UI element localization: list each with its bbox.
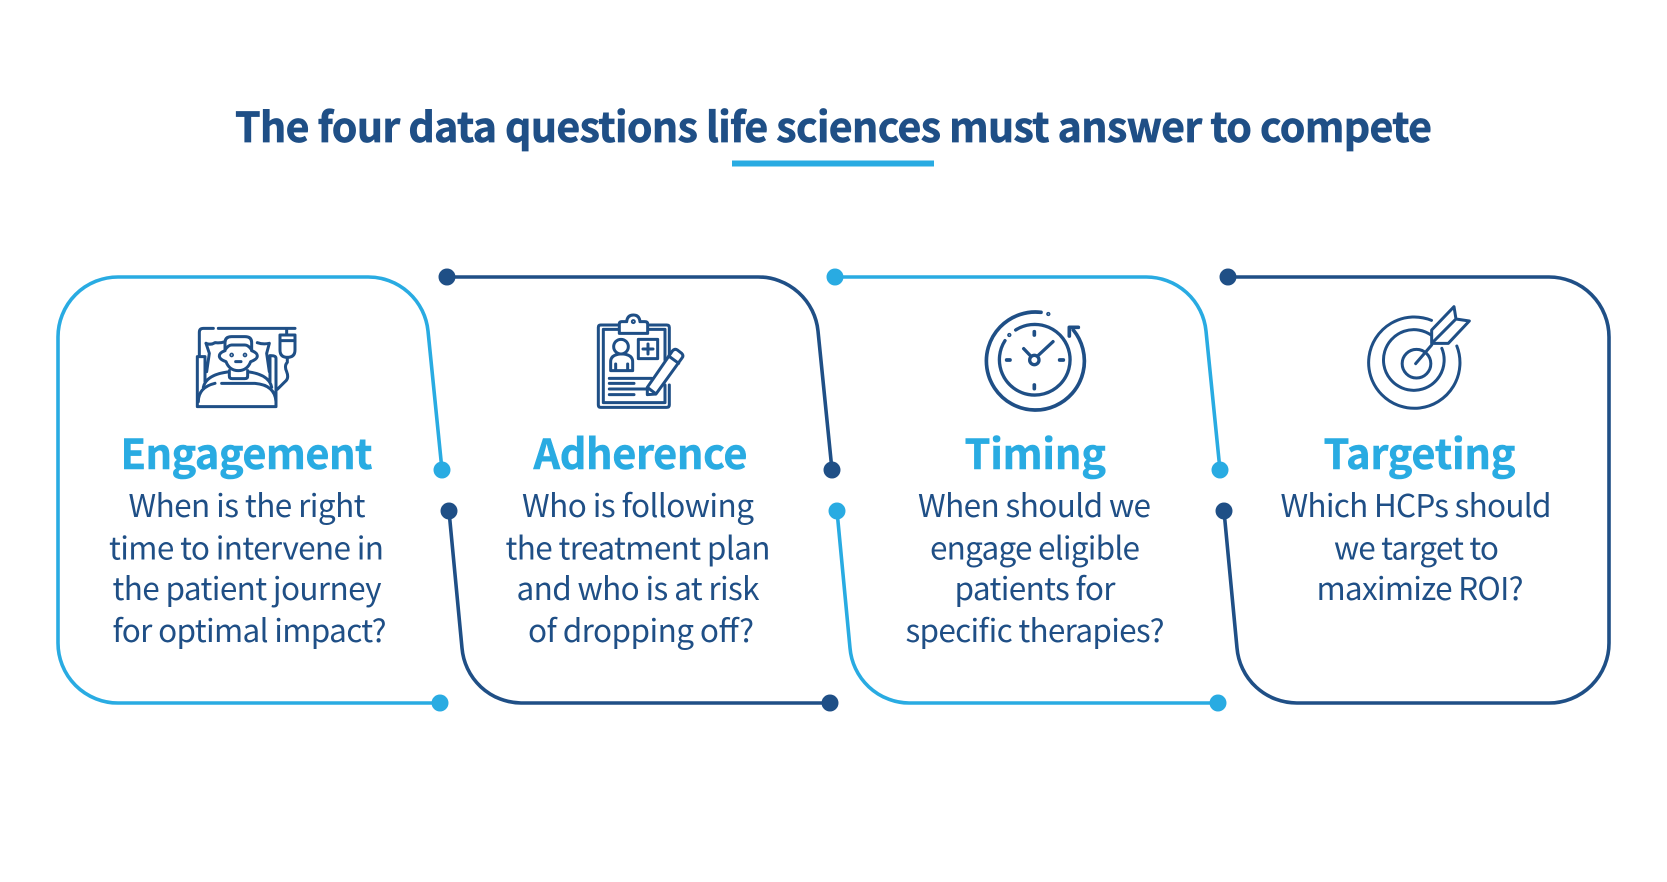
- text: timing question: When should we: [918, 481, 1151, 527]
- title: The four data questions life sciences must answer to compete: [235, 94, 1432, 154]
- icon: clock with arrow: [986, 312, 1084, 410]
- text: engagement question: for optimal impact?: [112, 606, 386, 652]
- text: targeting question: we target to: [1334, 524, 1499, 570]
- heading: Engagement: Engagement: [120, 421, 372, 481]
- text: engagement question: time to intervene in: [109, 524, 384, 570]
- text: adherence question: the treatment plan: [506, 524, 770, 570]
- text: targeting question: [1280, 481, 1552, 610]
- text: adherence question: and who is at risk: [516, 564, 760, 610]
- heading: Targeting: Targeting: [1324, 421, 1516, 481]
- text: adherence question: Who is following: [522, 481, 754, 527]
- icon: clipboard with patient record: [598, 315, 683, 407]
- panel outline: timing: [826, 268, 1228, 712]
- text: timing question: engage eligible: [930, 524, 1140, 570]
- text: timing question: patients for: [954, 564, 1116, 610]
- text: adherence question: of dropping off?: [528, 606, 754, 652]
- panel outline: engagement: [58, 277, 450, 712]
- heading: Timing: Timing: [964, 421, 1106, 481]
- text: targeting question: Which HCPs should: [1280, 481, 1552, 527]
- panel: timing: [826, 268, 1228, 712]
- panel: targeting: [1216, 268, 1609, 703]
- text: targeting question: maximize ROI?: [1316, 564, 1524, 610]
- text: adherence question: [506, 481, 770, 652]
- icon: target with arrow: [1369, 307, 1469, 408]
- panel: adherence: [438, 268, 840, 712]
- title underline: [732, 160, 934, 166]
- text: timing question: [906, 481, 1164, 652]
- icon: patient in bed: [197, 328, 295, 407]
- text: engagement question: the patient journey: [112, 564, 382, 610]
- text: engagement question: [109, 481, 386, 652]
- panel outline: adherence: [438, 268, 840, 712]
- text: engagement question: When is the right: [128, 481, 366, 527]
- panel outline: targeting: [1216, 268, 1609, 703]
- panel: engagement: [58, 277, 450, 712]
- heading: Adherence: Adherence: [532, 421, 748, 481]
- text: timing question: specific therapies?: [906, 606, 1164, 652]
